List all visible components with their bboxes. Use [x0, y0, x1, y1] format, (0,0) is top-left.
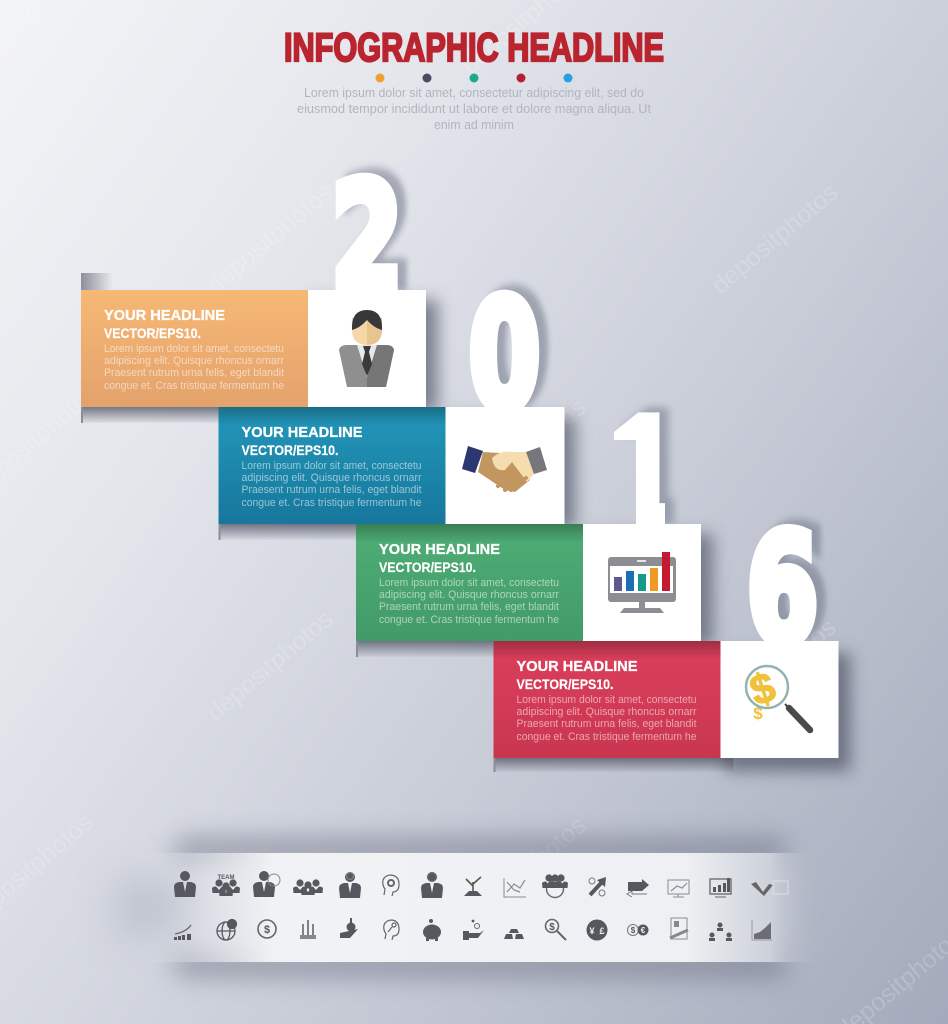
- watermarks: depositphotos: [201, 605, 338, 727]
- icon: people on globe: [542, 874, 568, 898]
- digit shadow 2: 2: [341, 147, 411, 321]
- title: INFOGRAPHIC HEADLINE: [284, 26, 664, 70]
- step text: adipiscing elit. Quisque rhoncus ornarr: [516, 706, 697, 718]
- icon row: top: [174, 871, 788, 898]
- step text: YOUR HEADLINE: [379, 541, 500, 558]
- step text: YOUR HEADLINE: [104, 307, 225, 324]
- intro text: enim ad minim: [434, 118, 514, 132]
- panel: step 1, orange: [81, 147, 438, 423]
- icon: dollar cycle: [258, 920, 276, 938]
- icon: dollar cycle: $: [264, 924, 270, 936]
- digit 6: 6: [747, 503, 818, 677]
- teal band: [218, 407, 446, 524]
- coloured dots: [376, 74, 572, 82]
- white icon box: [308, 290, 426, 407]
- intro text: Lorem ipsum dolor sit amet, consectetur adipiscing elit, sed do: [304, 86, 644, 100]
- panel: icon strip: [115, 840, 825, 975]
- step text: VECTOR/EPS10.: [516, 676, 614, 692]
- digit shadow 6: 6: [756, 498, 827, 672]
- icon: team: [212, 875, 240, 896]
- icon: resume: [670, 918, 688, 939]
- orange band: [81, 290, 308, 407]
- icon: exchange arrows: [627, 879, 649, 897]
- step text: adipiscing elit. Quisque rhoncus ornarr: [104, 355, 284, 367]
- step text: VECTOR/EPS10.: [104, 325, 201, 341]
- step text: YOUR HEADLINE: [516, 658, 638, 675]
- icon row: bottom: [174, 918, 772, 941]
- panel: step 3, green: [356, 379, 713, 657]
- step text: VECTOR/EPS10.: [242, 442, 338, 458]
- step text: congue et. Cras tristique fermentum he: [242, 497, 422, 509]
- icon: monitor with bar chart: [608, 552, 676, 613]
- green band: [356, 524, 583, 641]
- icon: piggy bank: [423, 919, 441, 941]
- step text: YOUR HEADLINE: [242, 424, 362, 441]
- step text: VECTOR/EPS10.: [379, 559, 476, 575]
- icon: magnifier over dollar: [744, 663, 810, 730]
- icon: bar chart monitor: [710, 878, 731, 897]
- icon: dollar euro exchange: [628, 924, 648, 936]
- step text: [516, 658, 697, 743]
- icon: handshake: [751, 881, 788, 896]
- watermarks: depositphotos: [706, 178, 843, 300]
- step text: [242, 424, 422, 509]
- icon: area growth chart: [752, 920, 772, 940]
- step text: congue et. Cras tristique fermentum he: [379, 614, 559, 626]
- icon: magnifier over dollar: $: [753, 704, 763, 723]
- step text: [379, 541, 559, 626]
- step text: Praesent rutrum urna felis, eget blandit: [242, 484, 422, 496]
- white icon box: [720, 641, 838, 758]
- icon: handshake: [462, 446, 547, 492]
- icon: head with gear: [383, 875, 399, 896]
- icon: network of people: [709, 922, 732, 941]
- watermarks: depositphotos: [454, 393, 591, 515]
- digit 1: 1: [610, 384, 678, 557]
- panel: step 4, red: [494, 498, 850, 772]
- step text: adipiscing elit. Quisque rhoncus ornarr: [242, 472, 422, 484]
- watermarks: depositphotos: [201, 178, 338, 300]
- step text: adipiscing elit. Quisque rhoncus ornarr: [379, 589, 559, 601]
- step text: Praesent rutrum urna felis, eget blandit: [104, 367, 284, 379]
- step text: Lorem ipsum dolor sit amet, consectetu: [516, 694, 696, 706]
- icon: rising arrows on hand: [300, 920, 316, 939]
- step text: [104, 307, 284, 392]
- icon: dollar euro exchange: $: [631, 926, 636, 935]
- intro text: eiusmod tempor incididunt ut labore et dolore magna aliqua. Ut: [297, 102, 652, 116]
- icon: growth plant: [464, 877, 482, 896]
- icon: magnifier over dollar: $: [744, 663, 781, 715]
- watermarks: depositphotos: [454, 811, 591, 933]
- step text: Praesent rutrum urna felis, eget blandit: [516, 718, 696, 730]
- digit 0: 0: [469, 269, 540, 443]
- icon: team: TEAM: [218, 875, 234, 881]
- step text: congue et. Cras tristique fermentum he: [516, 731, 696, 743]
- icon: line graph: [504, 878, 526, 897]
- icon: dollar magnifier: [546, 920, 566, 940]
- step text: congue et. Cras tristique fermentum he: [104, 380, 284, 392]
- icon: businessman: [339, 310, 394, 387]
- step text: Lorem ipsum dolor sit amet, consectetu: [242, 460, 422, 472]
- icon: presentation screen: [668, 880, 689, 897]
- digit shadow 1: 1: [619, 379, 687, 552]
- icon: target businessman: [421, 872, 443, 898]
- icon: dollar businessman: [174, 871, 196, 897]
- digit 2: 2: [332, 152, 402, 326]
- step text: Lorem ipsum dolor sit amet, consectetu: [104, 343, 284, 355]
- step text: Lorem ipsum dolor sit amet, consectetu: [379, 577, 559, 589]
- icon: coins from hand: [463, 920, 484, 940]
- white icon box: [446, 407, 564, 524]
- icon: rising trend: [174, 925, 191, 940]
- icon: money bag in hand: [340, 918, 358, 938]
- panel: step 2, teal: [218, 264, 576, 540]
- watermarks: depositphotos: [704, 613, 841, 735]
- icon: dollar euro exchange: €: [641, 926, 646, 935]
- intro text: [297, 86, 652, 132]
- icon: businessman with clock: [253, 871, 280, 897]
- icon: group: [293, 879, 323, 895]
- white icon box: [583, 524, 701, 641]
- icon: dollar magnifier: $: [549, 922, 555, 933]
- icon: percent arrow: [589, 877, 606, 896]
- step text: Praesent rutrum urna felis, eget blandit: [379, 601, 559, 613]
- icon: gold bars: [504, 929, 524, 939]
- icon: currency coin: £: [599, 926, 605, 936]
- icon: currency coin: ¥: [589, 926, 595, 936]
- red band: [494, 641, 720, 758]
- icon: head with key: [384, 920, 399, 940]
- icon: currency coin: [586, 920, 608, 940]
- icon: idea businessman: [339, 872, 361, 898]
- digit shadow 0: 0: [478, 264, 549, 438]
- icon: globe with coin: [217, 920, 236, 940]
